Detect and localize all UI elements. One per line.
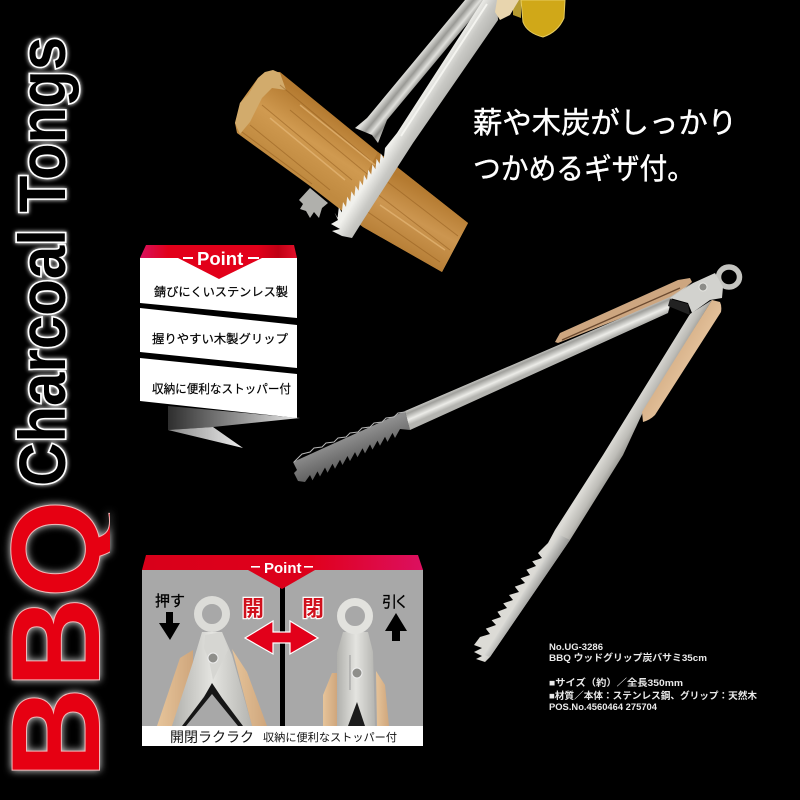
product specifications: No.UG-3286	[549, 642, 603, 653]
product specifications	[549, 642, 757, 713]
ribbon 1	[140, 258, 297, 318]
label: open: 開	[242, 596, 264, 621]
double arrow	[245, 621, 318, 654]
panel: point list	[140, 245, 300, 448]
header arrow	[248, 570, 315, 589]
item text: 収納に便利なストッパー付	[152, 381, 291, 396]
heading: Point: Point	[197, 248, 243, 269]
ribbon fold	[168, 406, 300, 448]
label: push: 押す	[155, 593, 185, 610]
headline	[473, 107, 737, 186]
hinge	[670, 273, 723, 313]
product specifications: ■サイズ（約）／全長350mm	[549, 677, 683, 689]
upper wood grip	[555, 278, 692, 343]
item text: 錆びにくいステンレス製	[154, 285, 288, 299]
back tong arm	[355, 0, 487, 143]
heading: Point	[251, 560, 313, 577]
front tong with teeth	[331, 0, 498, 238]
headline: 薪や木炭がしっかり	[473, 107, 737, 140]
title: Charcoal Tongs: Charcoal Tongs	[6, 37, 80, 486]
caption bar: 開閉ラクラク	[170, 729, 254, 745]
back tong tip	[299, 188, 328, 218]
label: close: 閉	[302, 596, 324, 621]
hinge opening	[668, 299, 690, 315]
label: pull: 引く	[382, 594, 409, 611]
caption bar: 収納に便利なストッパー付	[263, 730, 397, 744]
upper arm	[405, 283, 692, 430]
headline: つかめるギザ付。	[473, 153, 695, 186]
main product: tongs	[293, 267, 740, 662]
product specifications: POS.No.4560464 275704	[549, 702, 658, 713]
photo: tongs gripping firewood	[235, 0, 565, 272]
heading: Point: Point	[264, 560, 302, 577]
ribbon 2	[140, 308, 297, 368]
rivet	[699, 283, 707, 291]
icon: glove	[513, 0, 565, 37]
item text: 握りやすい木製グリップ	[152, 332, 288, 346]
header arrow	[178, 258, 262, 279]
firewood log	[235, 70, 468, 272]
header band	[142, 555, 423, 570]
arrow: down	[159, 612, 180, 640]
centre line	[280, 585, 285, 726]
wood grip	[495, 0, 519, 20]
open tongs	[157, 600, 267, 726]
lower arm and blade	[474, 300, 712, 662]
panel: open and close	[142, 555, 423, 746]
closed tongs	[323, 602, 389, 726]
ring	[718, 267, 740, 287]
upper blade with teeth	[293, 411, 410, 482]
header band	[140, 245, 297, 258]
product specifications: ■材質／本体：ステンレス鋼、グリップ：天然木	[549, 690, 757, 702]
product specifications: BBQ ウッドグリップ炭バサミ35cm	[549, 652, 707, 664]
heading: Point	[183, 248, 259, 269]
caption bar	[142, 726, 423, 746]
lower wood grip	[642, 300, 721, 422]
grey background	[142, 570, 423, 746]
ribbon 3	[140, 358, 297, 418]
arrow: up	[385, 613, 407, 641]
